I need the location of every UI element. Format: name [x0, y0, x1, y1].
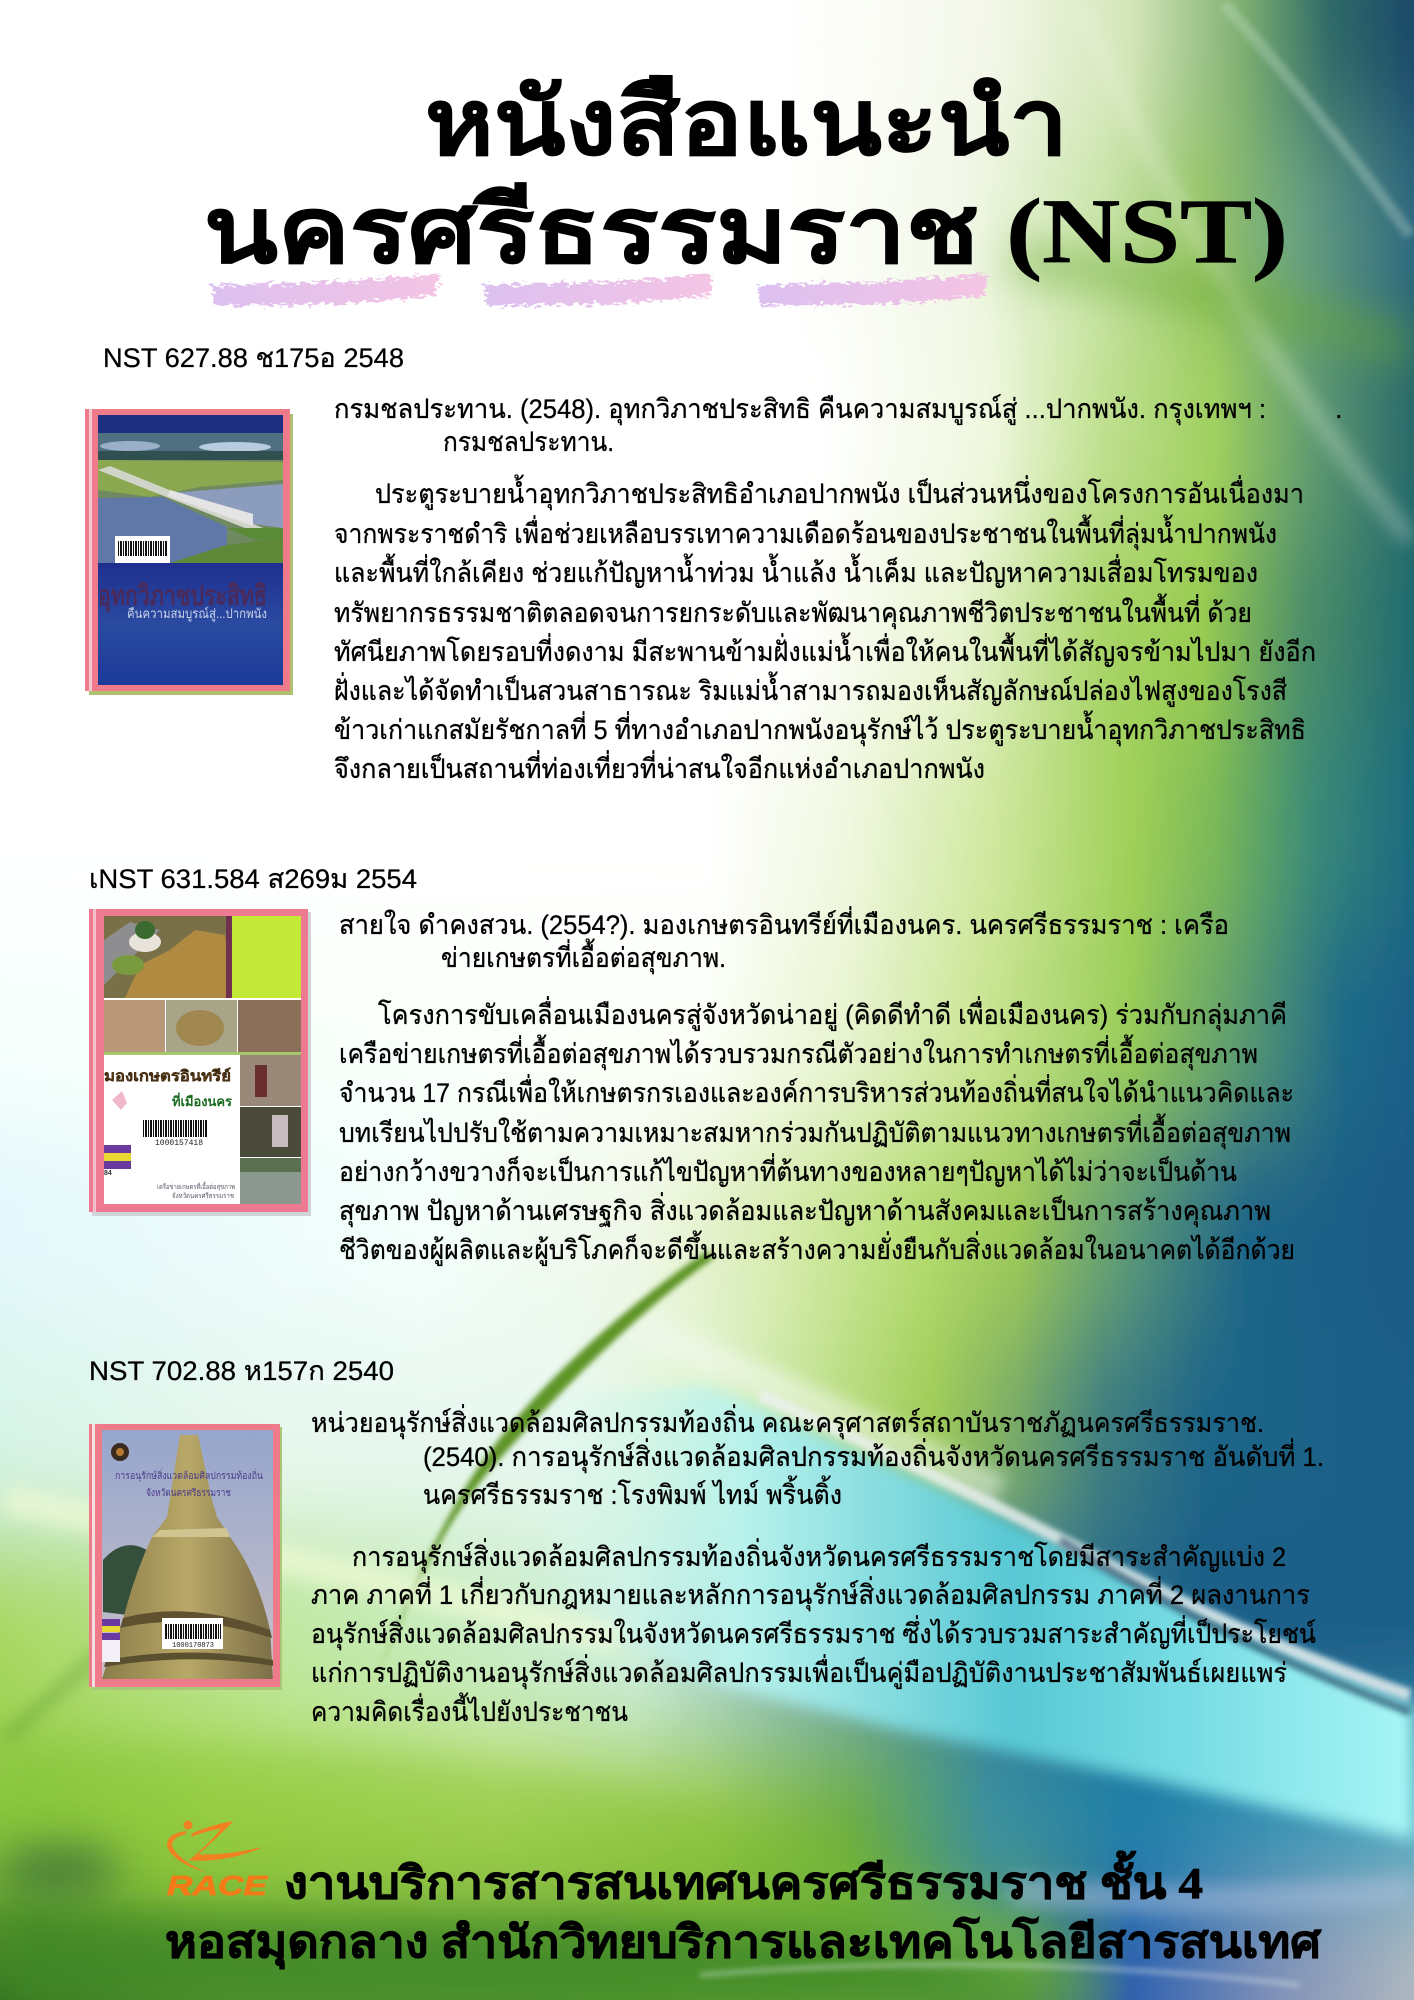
citation 1: กรมชลประทาน. (2548). อุทกวิภาชประสิทธิ คืนความสมบูรณ์สู่ ...ปากพนัง. กรุงเทพฯ :: [334, 393, 1266, 426]
title: หนังสือแนะนำ: [425, 72, 1068, 174]
book cover 2: 1000157418: [155, 1139, 203, 1148]
book cover 2: 84: [104, 1170, 112, 1177]
call number 3: NST 702.88 ห157ก 2540: [89, 1356, 394, 1386]
summary 2: สุขภาพ ปัญหาด้านเศรษฐกิจ สิ่งแวดล้อมและปัญหาด้านสังคมและเป็นการสร้างคุณภาพ: [339, 1192, 1271, 1228]
book cover 1: คืนความสมบูรณ์สู่...ปากพนัง: [127, 606, 267, 622]
book cover 2: เครือข่ายเกษตรที่เอื้อต่อสุขภาพ: [157, 1180, 235, 1191]
book cover 2: ที่เมืองนคร: [172, 1092, 232, 1109]
panel: book 3: [89, 1356, 1324, 1727]
citation 1: .: [1335, 394, 1343, 424]
summary 3: ความคิดเรื่องนี้ไปยังประชาชน: [311, 1692, 628, 1727]
citation 1: กรมชลประทาน.: [443, 427, 614, 457]
summary 3: อนุรักษ์สิ่งแวดล้อมศิลปกรรมในจังหวัดนครศรีธรรมราช ซึ่งได้รวบรวมสาระสำคัญที่เป็ประโยชน์: [311, 1615, 1316, 1651]
summary 1: จึงกลายเป็นสถานที่ท่องเที่ยวที่น่าสนใจอีกแห่งอำเภอปากพนัง: [334, 750, 985, 784]
decorative brush strokes under title: [212, 274, 988, 306]
summary 1: ประตูระบายน้ำอุทกวิภาชประสิทธิอำเภอปากพนัง เป็นส่วนหนึ่งของโครงการอันเนื่องมา: [375, 474, 1304, 511]
citation 2: [339, 906, 1229, 975]
citation 3: [311, 1404, 1324, 1510]
title: [204, 72, 1288, 282]
call number 1: NST 627.88 ช175อ 2548: [103, 343, 404, 373]
citation 3: (2540). การอนุรักษ์สิ่งแวดล้อมศิลปกรรมท้องถิ่นจังหวัดนครศรีธรรมราช อันดับที่ 1.: [423, 1438, 1324, 1474]
citation 3: หน่วยอนุรักษ์สิ่งแวดล้อมศิลปกรรมท้องถิ่น คณะครุศาสตร์สถาบันราชภัฏนครศรีธรรมราช.: [311, 1404, 1264, 1440]
book cover 3: การอนุรักษ์สิ่งแวดล้อมศิลปกรรมท้องถิ่น: [115, 1468, 263, 1482]
summary 2: อย่างกว้างขวางก็จะเป็นการแก้ไขปัญหาที่ต้นทางของหลายๆปัญหาได้ไม่ว่าจะเป็นด้าน: [339, 1153, 1237, 1187]
footer text: หอสมุดกลาง สำนักวิทยบริการและเทคโนโลยีสารสนเทศ: [165, 1915, 1322, 1970]
footer text: งานบริการสารสนเทศนครศรีธรรมราช ชั้น 4: [284, 1850, 1203, 1908]
summary 1: ฝั่งและได้จัดทำเป็นสวนสาธารณะ ริมแม่น้ำสามารถมองเห็นสัญลักษณ์ปล่องไฟสูงของโรงสี: [334, 671, 1287, 707]
logo: RACE: [167, 1820, 269, 1901]
book cover 2: จังหวัดนครศรีธรรมราช: [172, 1192, 234, 1200]
logo: RACE: RACE: [167, 1870, 269, 1901]
citation 3: นครศรีธรรมราช :โรงพิมพ์ ไทม์ พริ้นติ้ง: [423, 1475, 842, 1510]
book cover 2: มองเกษตรอินทรีย์: [104, 1067, 231, 1085]
summary 3: ภาค ภาคที่ 1 เกี่ยวกับกฎหมายและหลักการอนุรักษ์สิ่งแวดล้อมศิลปกรรม ภาคที่ 2 ผลงานการ: [311, 1576, 1310, 1612]
summary 3: การอนุรักษ์สิ่งแวดล้อมศิลปกรรมท้องถิ่นจังหวัดนครศรีธรรมราชโดยมีสาระสำคัญแบ่ง 2: [352, 1538, 1286, 1574]
summary 1: ข้าวเก่าแกสมัยรัชกาลที่ 5 ที่ทางอำเภอปากพนังอนุรักษ์ไว้ ประตูระบายน้ำอุทกวิภาชประสิทธิ: [334, 710, 1306, 747]
summary 2: เครือข่ายเกษตรที่เอื้อต่อสุขภาพได้รวบรวมกรณีตัวอย่างในการทำเกษตรที่เอื้อต่อสุขภาพ: [339, 1034, 1258, 1071]
book cover 1: อุทกวิภาชประสิทธิ: [98, 581, 267, 613]
book cover 2: [89, 909, 311, 1216]
footer text: [165, 1850, 1322, 1970]
title: นครศรีธรรมราช (NST): [204, 180, 1288, 282]
book cover 1: [85, 409, 293, 695]
panel: book 1: [85, 343, 1343, 784]
book cover 3: 1000170873: [172, 1642, 214, 1650]
summary 2: จำนวน 17 กรณีเพื่อให้เกษตรกรเองและองค์การบริหารส่วนท้องถิ่นที่สนใจได้นำแนวคิดและ: [339, 1074, 1294, 1108]
panel: book 2: [89, 864, 1295, 1266]
summary 2: [339, 996, 1295, 1266]
summary 1: และพื้นที่ใกล้เคียง ช่วยแก้ปัญหาน้ำท่วม น้ำแล้ง น้ำเค็ม และปัญหาความเสื่อมโทรมของ: [334, 553, 1258, 588]
summary 1: จากพระราชดำริ เพื่อช่วยเหลือบรรเทาความเดือดร้อนของประชาชนในพื้นที่ลุ่มน้ำปากพนัง: [334, 514, 1277, 551]
summary 3: แก่การปฏิบัติงานอนุรักษ์สิ่งแวดล้อมศิลปกรรมเพื่อเป็นคู่มือปฏิบัติงานประชาสัมพันธ์เผยแพร่: [311, 1654, 1287, 1690]
citation 2: สายใจ ดำคงสวน. (2554?). มองเกษตรอินทรีย์ที่เมืองนคร. นครศรีธรรมราช : เครือ: [339, 906, 1229, 940]
summary 1: ทรัพยากรธรรมชาติตลอดจนการยกระดับและพัฒนาคุณภาพชีวิตประชาชนในพื้นที่ ด้วย: [334, 593, 1252, 630]
citation 2: ข่ายเกษตรที่เอื้อต่อสุขภาพ.: [441, 938, 726, 975]
summary 3: [311, 1538, 1316, 1727]
summary 1: ทัศนียภาพโดยรอบที่งดงาม มีสะพานข้ามฝั่งแม่น้ำเพื่อให้คนในพื้นที่ได้สัญจรข้ามไปมา ยังอีก: [334, 632, 1316, 667]
summary 2: บทเรียนไปปรับใช้ตามความเหมาะสมหากร่วมกันปฏิบัติตามแนวทางเกษตรที่เอื้อต่อสุขภาพ: [339, 1113, 1291, 1150]
summary 2: โครงการขับเคลื่อนเมืองนครสู่จังหวัดน่าอยู่ (คิดดีทำดี เพื่อเมืองนคร) ร่วมกับกลุ่มภาคี: [378, 996, 1287, 1032]
summary 1: [334, 474, 1316, 784]
call number 2: เNST 631.584 ส269ม 2554: [89, 864, 417, 894]
book cover 3: จังหวัดนครศรีธรรมราช: [146, 1487, 231, 1499]
book cover 3: [89, 1424, 282, 1690]
citation 1: [334, 393, 1343, 457]
summary 2: ชีวิตของผู้ผลิตและผู้บริโภคก็จะดีขึ้นและสร้างความยั่งยืนกับสิ่งแวดล้อมในอนาคตได้อีกด้วย: [339, 1230, 1295, 1266]
